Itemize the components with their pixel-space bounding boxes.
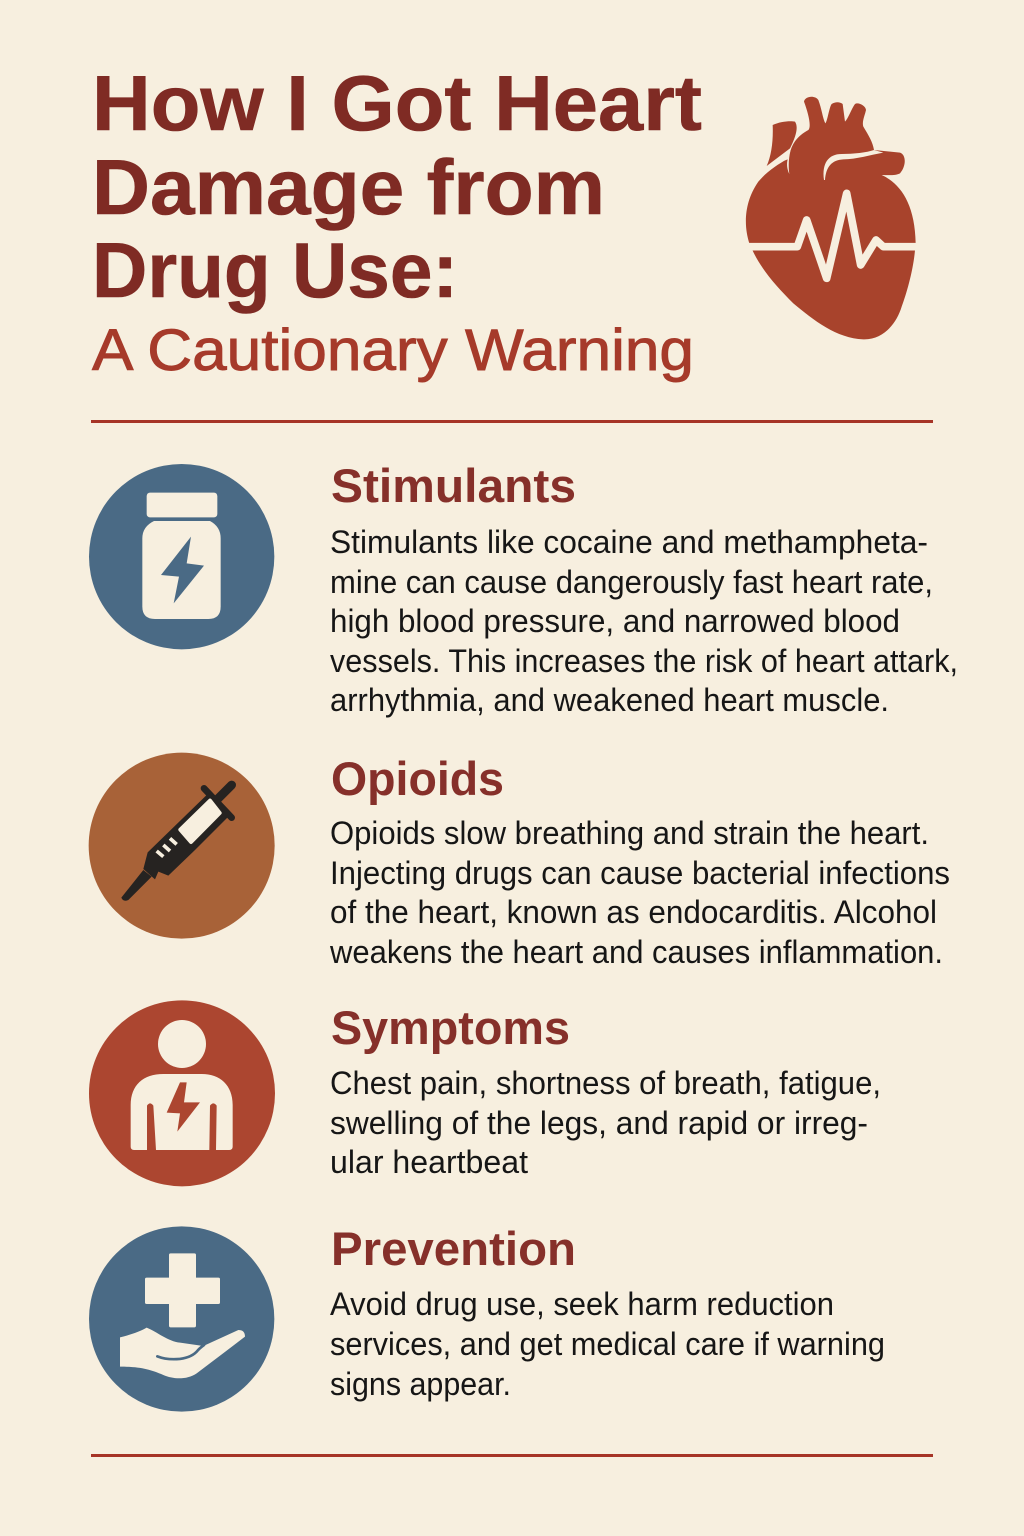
divider: top rule: [91, 420, 933, 423]
text: opioids body: weakens the heart and causes inflammation.: [329, 934, 943, 970]
title: How I Got Heart: [92, 59, 702, 147]
text: opioids body: Opioids slow breathing and strain the heart.: [330, 815, 929, 851]
text: stimulants body: vessels. This increases the risk of heart attark,: [330, 643, 958, 679]
icon: person with chest pain bolt: [89, 1000, 275, 1186]
text: opioids body: of the heart, known as endocarditis. Alcohol: [330, 894, 937, 930]
text: opioids body: [329, 815, 950, 970]
text: stimulants body: high blood pressure, and narrowed blood: [330, 603, 900, 639]
panel: stimulants: [89, 459, 958, 718]
text: stimulants body: arrhythmia, and weakened heart muscle.: [330, 682, 889, 718]
icon: syringe: [89, 753, 275, 939]
text: prevention body: Avoid drug use, seek harm reduction: [330, 1286, 834, 1322]
panel: opioids: [89, 752, 950, 970]
heading: stimulants: Stimulants: [331, 459, 576, 512]
text: stimulants body: Stimulants like cocaine and methampheta-: [330, 524, 928, 560]
panel: symptoms: [89, 1000, 881, 1186]
subtitle: A Cautionary Warning: [92, 318, 694, 383]
text: symptoms body: swelling of the legs, and rapid or irreg-: [330, 1105, 868, 1141]
text: symptoms body: [330, 1065, 881, 1180]
text: stimulants body: mine can cause dangerously fast heart rate,: [330, 564, 933, 600]
text: symptoms body: Chest pain, shortness of breath, fatigue,: [330, 1065, 881, 1101]
text: prevention body: services, and get medical care if warning: [330, 1326, 885, 1362]
panel: prevention: [89, 1222, 885, 1412]
text: opioids body: Injecting drugs can cause bacterial infections: [330, 855, 950, 891]
title: Drug Use:: [92, 226, 458, 314]
title: [92, 59, 702, 314]
icon: hand holding medical cross: [89, 1226, 274, 1412]
text: symptoms body: ular heartbeat: [330, 1144, 528, 1180]
text: prevention body: [330, 1286, 885, 1402]
heading: prevention: Prevention: [331, 1222, 576, 1275]
divider: bottom rule: [91, 1454, 933, 1457]
title: Damage from: [92, 143, 605, 231]
text: prevention body: signs appear.: [330, 1366, 511, 1402]
icon: anatomical heart with ECG line: [746, 97, 917, 339]
heading: opioids: Opioids: [331, 752, 504, 805]
heading: symptoms: Symptoms: [331, 1001, 570, 1054]
icon: medicine bottle with bolt: [89, 464, 274, 649]
text: stimulants body: [330, 524, 958, 718]
